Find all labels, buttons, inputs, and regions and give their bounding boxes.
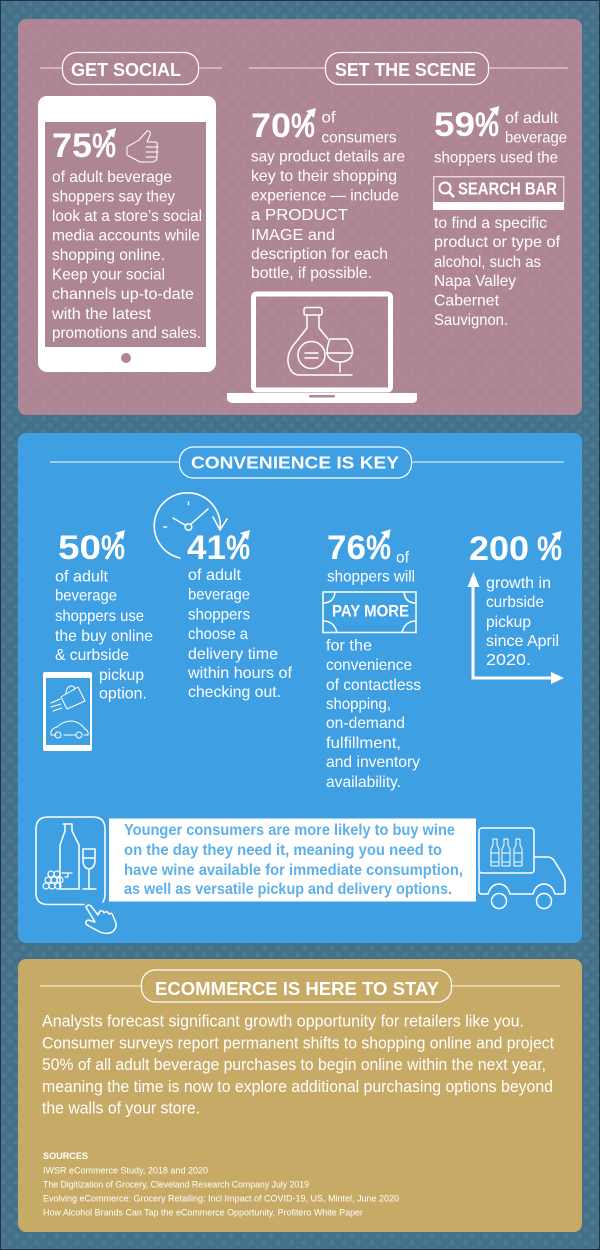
text: buy online: option. xyxy=(99,686,147,702)
stat: 50%: % xyxy=(101,529,125,567)
text: delivery time: choose a xyxy=(188,626,248,643)
text: curbside growth xyxy=(486,575,559,669)
text: analysts forecast: meaning the time is now to explore additional purchasing options beyond xyxy=(42,1077,553,1096)
stat: 50% xyxy=(58,529,125,567)
text: shoppers will: of xyxy=(396,550,410,567)
text: search outcome: Sauvignon. xyxy=(434,312,508,329)
stat: 76%: 76 xyxy=(327,529,366,567)
text: product details: key to their shopping xyxy=(251,168,397,185)
text: search outcome: alcohol, such as xyxy=(434,254,541,271)
stat: 200%: % xyxy=(537,530,562,568)
icon: pay more bill: PAY MORE xyxy=(332,603,409,621)
text: social paragraph: channels up-to-date xyxy=(52,286,194,303)
text: search outcome: to find a specific xyxy=(434,215,547,232)
text: search intro xyxy=(434,110,567,166)
icon: laptop with decanter xyxy=(227,294,417,403)
text: delivery time: checking out. xyxy=(188,684,281,701)
text: social paragraph: shopping online. xyxy=(52,247,165,264)
text: product details: say product details are xyxy=(251,149,405,166)
icon: search bar: SEARCH BAR xyxy=(458,179,557,199)
text: analysts forecast: 50% of all adult beverage purchases to begin online within the next year, xyxy=(42,1055,546,1074)
text: shoppers will: shoppers will xyxy=(327,569,415,586)
text: convenience reasons xyxy=(326,638,421,791)
stat: 41% xyxy=(187,529,250,567)
text: delivery time xyxy=(187,567,293,701)
text: convenience reasons: fulfillment, xyxy=(326,735,401,752)
text: buy online: the buy online xyxy=(55,628,153,645)
text: delivery time: of adult xyxy=(188,567,242,584)
text: buy online: & curbside xyxy=(55,647,129,664)
text: social paragraph: media accounts while xyxy=(52,228,200,244)
icon: clock xyxy=(154,493,227,558)
text: product details: of xyxy=(322,110,336,127)
icon: search bar xyxy=(433,177,564,210)
panel: digital engagement xyxy=(18,19,582,415)
stat: 59%: 59 xyxy=(434,106,475,144)
text: search outcome xyxy=(434,215,561,329)
text: buy online: pickup xyxy=(99,667,144,684)
text: sources: SOURCES xyxy=(43,1150,88,1161)
text: buy online: of adult xyxy=(55,569,109,586)
text: social paragraph: Keep your social xyxy=(52,266,165,284)
heading: get social: GET SOCIAL xyxy=(71,59,181,80)
text: analysts forecast xyxy=(42,1012,554,1118)
callout: younger consumers: have wine available for immediate consumption, xyxy=(124,862,463,879)
heading: set the scene: SET THE SCENE xyxy=(335,59,476,80)
icon: delivery truck xyxy=(479,828,565,908)
panel: convenience xyxy=(18,433,582,943)
text: convenience reasons: of contactless xyxy=(326,677,421,694)
text: product details xyxy=(251,110,405,282)
callout: younger consumers: Younger consumers are more likely to buy wine xyxy=(124,822,455,839)
text: search outcome: Napa Valley xyxy=(434,273,516,290)
text: search intro: shoppers used the xyxy=(434,150,558,166)
text: product details: IMAGE and xyxy=(251,227,335,244)
stat: 76%: % xyxy=(366,529,391,567)
stat: 75%: % xyxy=(92,127,116,165)
text: analysts forecast: Analysts forecast significant growth opportunity for retailers like you. xyxy=(42,1012,524,1030)
icon: thumbs up xyxy=(127,131,158,162)
stat: 70% xyxy=(251,107,316,145)
text: product details: a PRODUCT xyxy=(251,207,348,224)
text: social paragraph: shoppers say they xyxy=(52,188,175,206)
icon: phone with bag and car xyxy=(43,672,92,751)
stat: 41%: 41 xyxy=(187,529,226,567)
text: social paragraph: of adult beverage xyxy=(52,169,172,186)
icon: pay more bill xyxy=(323,592,416,632)
stat: 41%: % xyxy=(226,529,250,567)
text: sources xyxy=(43,1150,399,1218)
callout: younger consumers: on the day they need it, meaning you need to xyxy=(124,842,442,859)
text: delivery time: beverage xyxy=(188,586,250,604)
stat: 50%: 50 xyxy=(58,529,101,567)
text: analysts forecast: Consumer surveys report permanent shifts to shopping online and project xyxy=(42,1034,554,1052)
text: buy online xyxy=(55,569,153,702)
text: buy online: shoppers use xyxy=(55,608,144,625)
callout: younger consumers xyxy=(109,818,476,902)
text: sources: The Digitization of Grocery, Cleveland Research Company July 2019 xyxy=(43,1178,309,1190)
heading: get social xyxy=(40,52,222,84)
stat: 200% xyxy=(469,530,562,568)
text: search intro: beverage xyxy=(505,130,567,146)
stat: 200%: 200 xyxy=(469,530,529,568)
stat: 59%: % xyxy=(475,106,499,144)
text: convenience reasons: on-demand xyxy=(326,715,405,732)
text: social paragraph: promotions and sales. xyxy=(52,325,201,342)
text: convenience reasons: and inventory xyxy=(326,754,420,771)
icon: growth axes arrow xyxy=(468,572,564,684)
panel: ecommerce is here to stay xyxy=(18,959,582,1232)
text: curbside growth: pickup xyxy=(486,614,531,631)
icon: tablet with social stat xyxy=(38,96,216,372)
heading: convenience is key xyxy=(50,447,564,478)
text: search intro: of adult xyxy=(505,110,559,127)
text: convenience reasons: convenience xyxy=(326,657,412,674)
text: buy online: beverage xyxy=(55,588,117,604)
text: delivery time: shoppers xyxy=(188,606,250,624)
text: product details: consumers xyxy=(322,130,397,147)
text: social paragraph: look at a store’s social xyxy=(52,208,202,225)
heading: ecommerce is here to stay: ECOMMERCE IS HERE TO STAY xyxy=(155,978,440,999)
stat: 75%: 75 xyxy=(52,127,92,165)
text: sources: How Alcohol Brands Can Tap the eCommerce Opportunity, Profitero White Paper xyxy=(43,1206,363,1218)
stat: 70%: % xyxy=(291,107,315,145)
heading: ecommerce is here to stay xyxy=(40,970,560,1002)
text: search outcome: product or type of xyxy=(434,234,561,251)
stat: 75% xyxy=(52,127,116,165)
text: analysts forecast: the walls of your store. xyxy=(42,1098,200,1118)
text: social paragraph xyxy=(51,169,202,342)
text: curbside growth: curbside xyxy=(486,594,544,611)
text: shoppers will xyxy=(327,550,415,586)
text: delivery time: delivery time xyxy=(188,646,278,663)
text: convenience reasons: shopping, xyxy=(326,696,391,713)
icon: wine shelf with pointing hand xyxy=(36,817,116,933)
text: curbside growth: since April xyxy=(486,633,559,650)
text: convenience reasons: for the xyxy=(326,638,372,655)
text: search outcome: Cabernet xyxy=(434,293,500,310)
stat: 59% xyxy=(434,106,499,144)
text: product details: description for each xyxy=(251,246,388,263)
text: social paragraph: with the latest xyxy=(51,306,152,323)
text: delivery time: within hours of xyxy=(187,665,293,682)
text: curbside growth: growth in xyxy=(486,575,551,592)
stat: 76% xyxy=(327,529,391,567)
text: convenience reasons: availability. xyxy=(326,774,401,791)
stat: 70%: 70 xyxy=(251,107,291,145)
heading: convenience is key: CONVENIENCE IS KEY xyxy=(191,452,399,472)
text: product details: experience — include xyxy=(251,188,399,204)
heading: set the scene xyxy=(249,52,568,84)
text: sources: Evolving eCommerce: Grocery Retailing: Incl Impact of COVID-19, US, Mintel, June 2020 xyxy=(43,1192,399,1204)
text: sources: IWSR eCommerce Study, 2018 and 2020 xyxy=(43,1164,208,1176)
text: curbside growth: 2020. xyxy=(486,652,531,669)
callout: younger consumers: as well as versatile pickup and delivery options. xyxy=(124,881,452,898)
text: product details: bottle, if possible. xyxy=(251,265,372,282)
